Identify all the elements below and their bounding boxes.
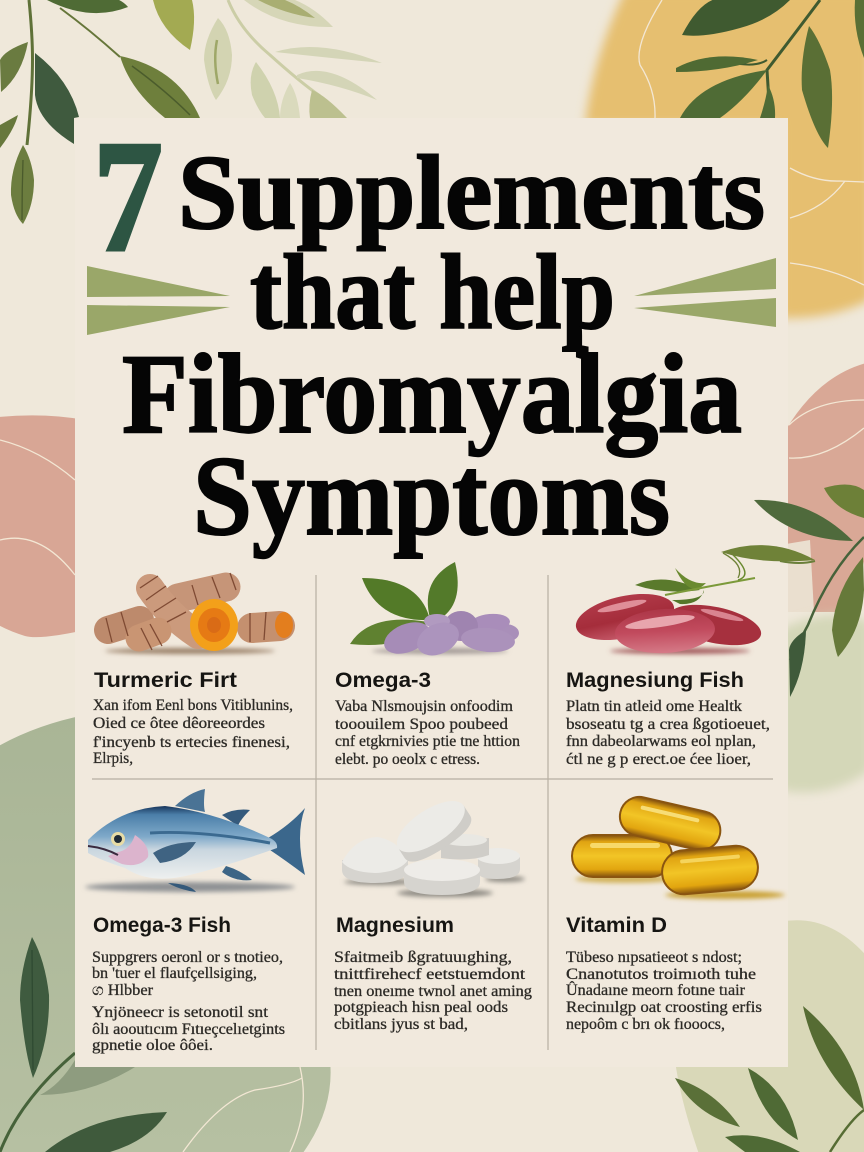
grid dividers	[92, 575, 773, 1050]
leaves: right branch overlapping panel	[721, 484, 864, 697]
body text: tooouilem Spoo poubeed	[335, 716, 508, 733]
icon: red capsules with sprig	[572, 552, 765, 656]
body text: fnn dabeolarwams eol nplan,	[566, 733, 756, 750]
body text: nepoôm c brı ok fıooocs,	[566, 1016, 725, 1033]
body text: Xan ifom Eenl bons Vitiblunins,	[93, 697, 293, 714]
decorative arrows left	[87, 266, 230, 335]
leaves: top left branch	[0, 0, 382, 224]
body text: ćtl ne g p erect.oe ćee lioer,	[566, 751, 751, 768]
card: turmeric	[93, 573, 293, 767]
leaves: top right branch	[676, 0, 864, 148]
title line: that help: that help	[250, 234, 615, 352]
body text: Platn tin atleid ome Healtk	[566, 698, 742, 715]
heading: Magnesiung Fish: Magnesiung Fish	[566, 669, 744, 692]
body text	[334, 949, 532, 1033]
icon: leaves and purple pods	[350, 562, 519, 662]
body text: gpnetie oloe ôôei.	[92, 1037, 213, 1054]
body text: cbitlans jyus st bad,	[334, 1016, 468, 1033]
title line: Supplements: Supplements	[178, 134, 765, 251]
body text: Ynjöneecr is setonotil snt	[92, 1004, 269, 1021]
title line: Symptoms: Symptoms	[193, 434, 670, 559]
body text: ග Hlbber	[92, 982, 154, 999]
body text: elebt. po oeolx c etress.	[335, 751, 480, 768]
body text: tnen oneıme twnol anet aming	[334, 983, 532, 1000]
body text: Cnanotutos troimıoth tuhe	[566, 966, 756, 983]
body text	[92, 949, 285, 1054]
body text: Suppgrers oeronl or s tnotieo,	[92, 949, 283, 966]
heading: Omega-3 Fish: Omega-3 Fish	[93, 914, 231, 937]
heading: Magnesium: Magnesium	[336, 914, 454, 937]
card: vitamin D	[566, 793, 785, 1033]
body text: Vaba Nlsmoujsin onfoodim	[335, 698, 513, 715]
body text	[335, 698, 520, 768]
card: omega-3 fish	[85, 789, 305, 1054]
body text	[566, 949, 762, 1033]
icon: white tablets	[342, 791, 525, 897]
body text: Elrpis,	[93, 750, 133, 767]
body text: tnittfirehecf eetstuemdont	[334, 966, 526, 983]
body text: Sfaitmeib ßgratuuıghing,	[334, 949, 512, 966]
icon: turmeric roots	[105, 573, 293, 654]
heading: Turmeric Firt: Turmeric Firt	[94, 669, 237, 692]
decorative arrows right	[634, 258, 776, 327]
heading: Vitamin D: Vitamin D	[566, 914, 667, 937]
background blob: green left	[0, 715, 331, 1152]
body text: Tübeso nıpsatieeot s ndost;	[566, 949, 742, 966]
card: magnesium fish	[566, 552, 770, 768]
body text: bsoseatu tg a crea ßgotioeuet,	[566, 716, 770, 733]
title	[93, 107, 765, 559]
card: omega-3	[335, 562, 520, 768]
title numeral 7: 7	[93, 107, 163, 285]
leaves: bottom right branch	[675, 1006, 864, 1152]
background blob: yellow	[585, 0, 864, 318]
icon: golden softgels	[572, 793, 785, 899]
icon: fish	[85, 789, 305, 892]
background patch: cream near right leaves	[780, 540, 814, 612]
body text: Oied ce ôtee dêoreeordes	[93, 715, 265, 732]
background blob: pink left	[0, 415, 85, 637]
background blob: pale green right	[780, 615, 864, 792]
body text: bn 'tuer el flaufçellsiging,	[92, 965, 257, 982]
body text: cnf etgkrnivies ptie tne httion	[335, 733, 520, 750]
body text: f'incyenb ts ertecies finenesi,	[93, 734, 290, 751]
body text: Recinıılgp oat croosting erfis	[566, 999, 762, 1016]
heading: Omega-3: Omega-3	[335, 669, 431, 692]
body text: ôlı aooutıcım Fıtıeçcelıetgints	[92, 1021, 285, 1038]
background blob: pink right	[780, 362, 864, 612]
body text: potgpieach hisn peal oods	[334, 999, 508, 1016]
leaves: bottom left branch	[0, 937, 167, 1152]
body text	[93, 697, 293, 767]
body text: Ûnadaıne meorn fotıne tıair	[566, 982, 746, 999]
card: magnesium	[334, 791, 532, 1033]
main panel	[75, 118, 788, 1067]
body text	[566, 698, 770, 768]
title line: Fibromyalgia: Fibromyalgia	[122, 332, 742, 457]
background blob: pale green bottom right	[675, 920, 864, 1152]
